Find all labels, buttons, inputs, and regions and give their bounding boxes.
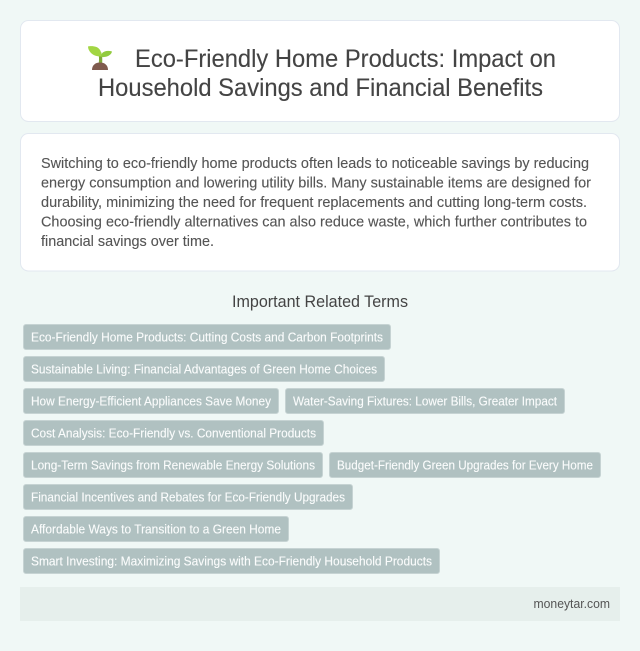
tag: affordable transition: Affordable Ways to Transition to a Green Home xyxy=(31,522,281,536)
tag: affordable transition xyxy=(24,516,288,542)
footer bar xyxy=(20,587,620,621)
title: Household Savings and Financial Benefits xyxy=(98,74,543,102)
title: Eco-Friendly Home Products: Impact on xyxy=(135,45,556,73)
summary text: Switching to eco-friendly home products often leads to noticeable savings by reducing xyxy=(41,155,589,172)
tag: sustainable living: Sustainable Living: Financial Advantages of Green Home Choices xyxy=(31,362,377,376)
tag: budget-friendly upgrades: Budget-Friendly Green Upgrades for Every Home xyxy=(337,458,593,472)
footer source: moneytar.com xyxy=(534,597,610,611)
summary text xyxy=(41,155,591,250)
tag: energy-efficient appliances xyxy=(24,388,278,414)
tag: financial incentives: Financial Incentives and Rebates for Eco-Friendly Upgrades xyxy=(31,490,345,504)
tag: cost analysis xyxy=(24,420,324,446)
summary text: energy consumption and lowering utility bills. Many sustainable items are designed for xyxy=(41,174,591,192)
tag: water-saving fixtures: Water-Saving Fixtures: Lower Bills, Greater Impact xyxy=(293,394,557,408)
tag: sustainable living xyxy=(24,356,384,382)
tag: financial incentives xyxy=(24,484,352,510)
tag: budget-friendly upgrades xyxy=(330,452,600,478)
tag: cutting costs xyxy=(24,324,390,350)
panel: summary xyxy=(20,134,620,271)
heading: important related terms: Important Related Terms xyxy=(232,293,408,311)
icon: seedling xyxy=(88,46,112,70)
tag: long-term savings: Long-Term Savings from Renewable Energy Solutions xyxy=(31,458,315,472)
tag: long-term savings xyxy=(24,452,322,478)
tag: energy-efficient appliances: How Energy-Efficient Appliances Save Money xyxy=(31,394,272,408)
tag: smart investing: Smart Investing: Maximizing Savings with Eco-Friendly Household Products xyxy=(31,554,432,568)
tag: cutting costs: Eco-Friendly Home Products: Cutting Costs and Carbon Footprints xyxy=(31,330,383,344)
summary text: Choosing eco-friendly alternatives can also reduce waste, which further contributes to xyxy=(41,214,587,230)
summary text: financial savings over time. xyxy=(41,233,214,250)
tag: cost analysis: Cost Analysis: Eco-Friendly vs. Conventional Products xyxy=(31,426,316,440)
title xyxy=(98,45,556,102)
tag list xyxy=(24,324,600,574)
panel: title card xyxy=(20,20,620,122)
tag: water-saving fixtures xyxy=(286,388,564,414)
summary text: durability, minimizing the need for frequent replacements and cutting long-term costs. xyxy=(41,194,587,211)
tag: smart investing xyxy=(24,548,440,574)
